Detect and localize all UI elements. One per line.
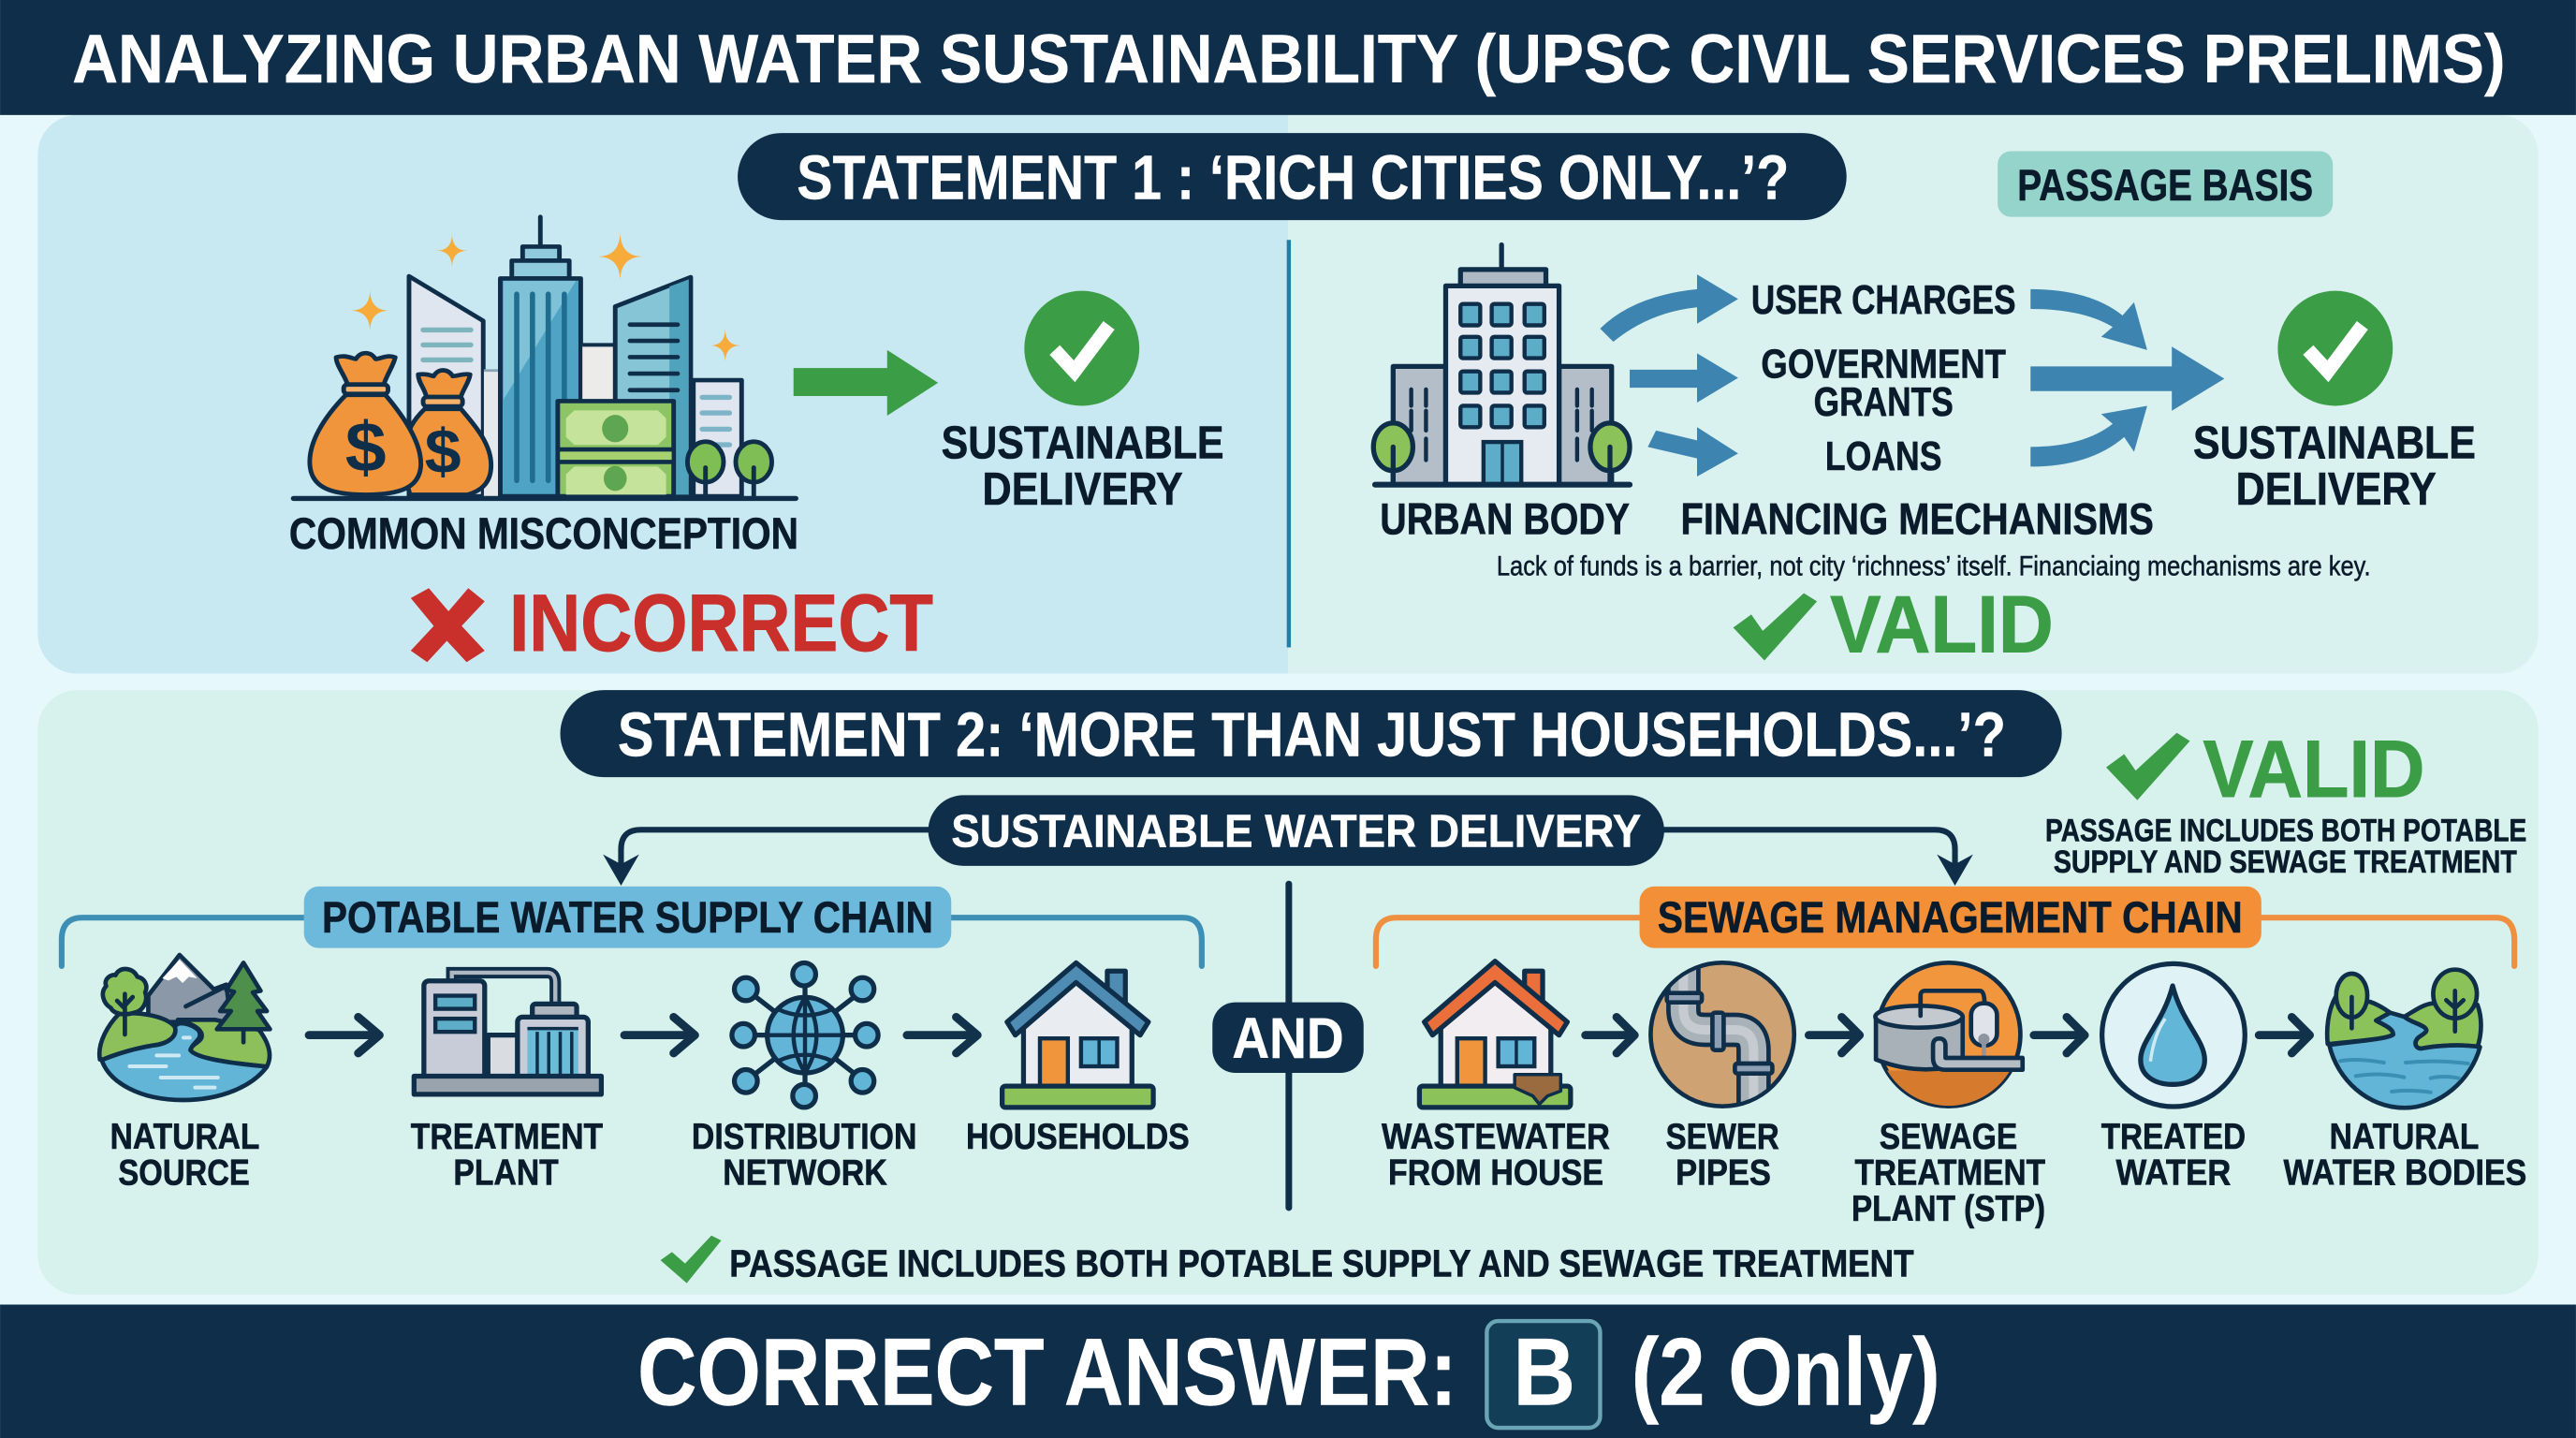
note: passage includes [2045, 814, 2526, 880]
label: sustainable delivery left: SUSTAINABLE [942, 418, 1224, 469]
verdict: incorrect: INCORRECT [509, 579, 933, 668]
arrow: urban body to user charges [1600, 274, 1738, 342]
footer: correct answer: B [1513, 1319, 1575, 1426]
footer: correct answer [0, 1304, 2576, 1438]
note: lack of funds: Lack of funds is a barrier, not city ‘richness’ itself. Financiaing mechanisms are key. [1497, 550, 2371, 581]
arrow: urban body to grants [1630, 353, 1738, 403]
icon: distribution network [732, 962, 878, 1108]
icon: check circle left [1024, 291, 1139, 405]
labels: sewage chain: TREATED [2101, 1117, 2246, 1157]
icon: natural water bodies [2327, 970, 2481, 1108]
icon: rich city with money: $ [425, 417, 461, 487]
icon: rich city with money: $ [345, 408, 387, 487]
label: sustainable delivery right: DELIVERY [2236, 464, 2437, 515]
icon: check circle right [2277, 291, 2393, 405]
bracket: potable chain [62, 917, 1202, 966]
icon: sewage treatment plant [1875, 962, 2023, 1107]
verdict: valid statement 1: VALID [1830, 580, 2054, 670]
label: sustainable delivery right: SUSTAINABLE [2193, 418, 2476, 469]
icon: sewer pipes [1650, 962, 1794, 1111]
labels: potable chain: HOUSEHOLDS [966, 1117, 1190, 1157]
heading: potable water supply chain: POTABLE WATER SUPPLY CHAIN [322, 893, 933, 943]
arrow: misconception to delivery [794, 350, 938, 416]
labels: sewage chain: WATER [2116, 1152, 2231, 1193]
panel: statement 1 [37, 115, 2539, 674]
labels: sewage chain: SEWAGE [1880, 1117, 2017, 1157]
label: sustainable delivery right [2193, 418, 2476, 515]
labels: potable chain: SOURCE [118, 1152, 250, 1193]
arrow: treated to natural bodies [2259, 1017, 2310, 1053]
label: financing mechanisms: FINANCING MECHANISMS [1680, 494, 2154, 544]
labels: sewage chain: TREATMENT [1854, 1152, 2045, 1193]
arrow: source to plant [309, 1017, 379, 1053]
labels: sewage chain: PLANT (STP) [1852, 1189, 2045, 1229]
labels: sewage chain [1382, 1117, 2526, 1229]
icon: treatment plant [414, 973, 601, 1094]
label: financing options: GRANTS [1814, 379, 1954, 425]
labels: potable chain: NETWORK [723, 1152, 887, 1193]
labels: sewage chain: WATER BODIES [2284, 1152, 2526, 1193]
icon: wastewater house [1419, 961, 1571, 1108]
labels: potable chain: NATURAL [110, 1117, 259, 1157]
arrow: network to households [907, 1017, 977, 1053]
labels: sewage chain: SEWER [1666, 1117, 1779, 1157]
panel: statement 2 [37, 690, 2539, 1295]
heading: sustainable water delivery pill: SUSTAINABLE WATER DELIVERY [951, 807, 1641, 858]
labels: sewage chain: NATURAL [2330, 1117, 2479, 1157]
verdict: valid statement 1 [1734, 580, 2054, 670]
bracket: sewage chain [1376, 917, 2514, 966]
labels: sewage chain: WASTEWATER [1382, 1117, 1610, 1157]
arrow: sewer to stp [1808, 1017, 1860, 1053]
badge: passage basis [1998, 151, 2333, 217]
label: financing options: USER CHARGES [1751, 277, 2015, 323]
verdict: valid statement 2 [2106, 725, 2424, 814]
icon: natural source [99, 955, 270, 1100]
label: financing options: LOANS [1825, 433, 1942, 479]
title bar [0, 0, 2576, 115]
heading: statement 2 pill: STATEMENT 2: ‘MORE THAN JUST HOUSEHOLDS...’? [618, 700, 2006, 770]
connector: delivery to chains [603, 829, 1973, 886]
labels: potable chain: PLANT [453, 1152, 559, 1193]
footer: correct answer: CORRECT ANSWER: [637, 1319, 1457, 1426]
arrow: plant to network [624, 1017, 695, 1053]
heading: sewage management chain: SEWAGE MANAGEMENT CHAIN [1658, 893, 2243, 943]
labels: sewage chain: PIPES [1676, 1152, 1771, 1193]
footer: correct answer: (2 Only) [1632, 1319, 1940, 1426]
labels: potable chain [110, 1117, 1190, 1193]
label: common misconception: COMMON MISCONCEPTION [289, 509, 798, 559]
label: financing options: GOVERNMENT [1761, 342, 2006, 388]
labels: potable chain: DISTRIBUTION [692, 1117, 916, 1157]
arrow: urban body to loans [1647, 427, 1738, 477]
vertical divider statement 1 [1288, 240, 1290, 647]
label: urban body: URBAN BODY [1380, 494, 1630, 544]
label: sustainable delivery left: DELIVERY [983, 464, 1183, 515]
icon: urban body building [1373, 244, 1630, 485]
arrows: financing to delivery [2030, 289, 2224, 466]
labels: potable chain: TREATMENT [411, 1117, 604, 1157]
note: passage includes both: PASSAGE INCLUDES BOTH POTABLE SUPPLY AND SEWAGE TREATMENT [729, 1242, 1914, 1285]
vertical divider statement 2 [1287, 884, 1291, 1208]
badge: passage basis: PASSAGE BASIS [2017, 161, 2313, 211]
verdict: valid statement 2: VALID [2203, 725, 2424, 814]
icon: treated water [2102, 963, 2245, 1107]
arrow: stp to treated water [2034, 1017, 2085, 1053]
labels: sewage chain: FROM HOUSE [1388, 1152, 1603, 1193]
badge: and: AND [1232, 1006, 1344, 1071]
label: financing options [1751, 277, 2015, 479]
heading: statement 1 pill: STATEMENT 1 : ‘RICH CITIES ONLY...’? [797, 143, 1789, 213]
label: sustainable delivery left [942, 418, 1224, 515]
heading: sustainable water delivery pill [929, 795, 1664, 866]
icon: rich city with money [294, 217, 796, 498]
arrow: house to sewer [1586, 1017, 1634, 1053]
icon: households [1003, 962, 1153, 1108]
